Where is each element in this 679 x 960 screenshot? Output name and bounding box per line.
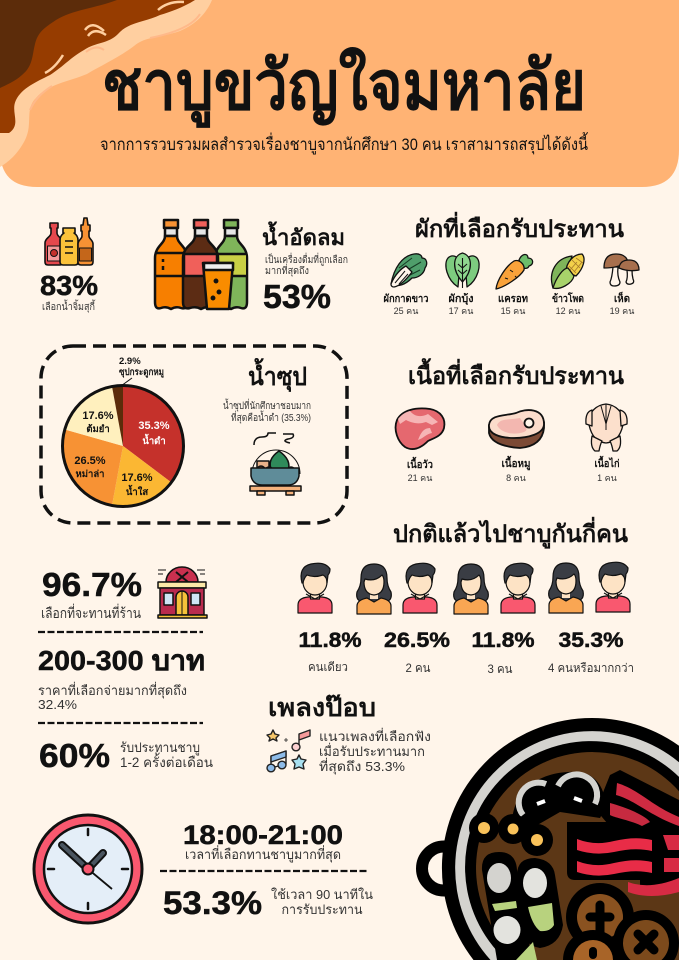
pie callout: 2.9% — [119, 356, 141, 367]
panel: vegetables — [384, 211, 639, 316]
pie chart — [62, 378, 184, 506]
description: เป็นเครื่องดื่มที่ถูกเลือก — [265, 252, 348, 266]
pie labels: หม่าล่า — [75, 469, 105, 480]
icon: carrot — [496, 254, 533, 289]
description: น้ำซุปที่นักศึกษาชอบมาก — [223, 398, 311, 412]
panel: soup — [41, 346, 347, 523]
panel: time — [34, 815, 373, 923]
icon: morning glory — [446, 253, 479, 288]
percentages: 26.5% — [384, 629, 450, 652]
icon: napa cabbage — [391, 254, 427, 287]
pie callout — [119, 356, 164, 379]
divider — [160, 870, 368, 872]
percentage: 53% — [263, 278, 331, 315]
heading: น้ำซุป — [248, 357, 307, 393]
description: เมื่อรับประทานมาก — [319, 743, 425, 759]
heading: น้ำอัดลม — [262, 221, 345, 250]
description: มากที่สุดถึง — [265, 263, 309, 277]
panel: dipping sauce — [40, 218, 98, 313]
heading: ปกติแล้วไปชาบูกันกี่คน — [393, 516, 629, 549]
pie labels: 17.6% — [82, 410, 114, 422]
description — [265, 252, 348, 277]
panel: dining habits — [38, 566, 213, 774]
duration caption: การรับประทาน — [282, 902, 363, 917]
title: ชาบูขวัญใจมหาลัย — [102, 46, 586, 129]
caption: เลือกน้ำจิ้มสุกี้ — [42, 299, 96, 313]
heading: เนื้อที่เลือกรับประทาน — [408, 357, 625, 390]
icon: soda bottles and glass — [155, 220, 247, 309]
description: แนวเพลงที่เลือกฟัง — [319, 728, 431, 744]
percentages: 11.8% — [298, 629, 362, 652]
header banner — [0, 0, 679, 187]
divider — [38, 722, 203, 724]
meat labels: เนื้อไก่ — [594, 455, 620, 470]
description: ที่สุดถึง 53.3% — [319, 758, 405, 775]
meat counts: 1 คน — [597, 473, 617, 483]
vegetable counts: 15 คน — [501, 306, 525, 316]
budget caption: ราคาที่เลือกจ่ายมากที่สุดถึง — [38, 682, 187, 699]
budget caption: 32.4% — [38, 697, 77, 712]
pie callout: ซุปกระดูกหมู — [119, 366, 164, 379]
frequency caption: 1-2 ครั้งต่อเดือน — [120, 752, 213, 770]
icon: pork — [489, 410, 544, 448]
frequency stat: 60% — [39, 737, 110, 774]
divider — [38, 631, 203, 633]
panel: soft drinks — [155, 220, 348, 315]
icon: restaurant — [158, 567, 207, 618]
dashed frame — [41, 346, 347, 523]
description — [223, 398, 311, 424]
percentages: 11.8% — [472, 629, 535, 652]
dine in stat: 96.7% — [42, 566, 142, 603]
vegetable counts: 17 คน — [449, 306, 473, 316]
icon: beef — [396, 408, 444, 449]
heading: เพลงป๊อบ — [268, 694, 376, 722]
duration stat: 53.3% — [163, 885, 262, 921]
icon: music notes — [267, 730, 310, 772]
panel: party size — [298, 516, 634, 676]
pie labels: น้ำดำ — [142, 433, 166, 447]
vegetable counts: 19 คน — [610, 306, 634, 316]
vegetable labels — [384, 291, 630, 306]
percentage: 83% — [40, 270, 98, 301]
heading: ผักที่เลือกรับประทาน — [415, 211, 625, 243]
panel: pop music — [267, 694, 431, 775]
icon: clock — [34, 815, 142, 923]
captions: 3 คน — [488, 662, 512, 676]
duration caption: ใช้เวลา 90 นาทีใน — [271, 887, 373, 902]
meat counts: 8 คน — [506, 473, 526, 483]
budget caption — [38, 682, 187, 712]
vegetable labels: ผักกาดขาว — [384, 293, 429, 305]
icon: hotpot — [250, 433, 301, 495]
vegetable counts — [394, 306, 634, 316]
captions — [308, 660, 634, 676]
time range: 18:00-21:00 — [183, 820, 343, 850]
panel: meats — [396, 357, 627, 483]
pie labels: 17.6% — [121, 472, 153, 484]
meat labels — [407, 455, 620, 471]
icon: sauce bottles — [45, 218, 93, 265]
meat counts — [408, 473, 617, 483]
meat labels: เนื้อหมู — [502, 455, 531, 471]
captions: 2 คน — [406, 661, 430, 675]
pie labels: น้ำใส — [126, 484, 148, 498]
frequency caption — [120, 740, 213, 770]
vegetable labels: เห็ด — [614, 291, 630, 305]
captions: 4 คนหรือมากกว่า — [548, 661, 634, 675]
captions: คนเดียว — [308, 660, 348, 674]
pie labels: 35.3% — [138, 420, 170, 432]
percentages — [298, 629, 624, 652]
pie labels: 26.5% — [74, 455, 106, 467]
description: ที่สุดคือน้ำดำ (35.3%) — [231, 410, 311, 424]
percentages: 35.3% — [558, 629, 624, 652]
meat labels: เนื้อวัว — [407, 456, 433, 471]
pie labels — [74, 410, 170, 498]
vegetable labels: แครอท — [498, 293, 528, 305]
duration caption — [271, 887, 373, 917]
icon: chicken — [586, 404, 627, 451]
description — [319, 728, 431, 775]
vegetable counts: 12 คน — [556, 306, 580, 316]
frequency caption: รับประทานชาบู — [120, 740, 200, 756]
time caption: เวลาที่เลือกทานชาบูมากที่สุด — [185, 845, 341, 863]
icon: mushrooms — [604, 254, 639, 286]
vegetable labels: ผักบุ้ง — [448, 292, 474, 306]
subtitle: จากการรวบรวมผลสำรวจเรื่องชาบูจากนักศึกษา 30 คน เราสามารถสรุปได้ดังนี้ — [100, 132, 588, 155]
vegetable labels: ข้าวโพด — [552, 292, 584, 305]
dine in caption: เลือกที่จะทานที่ร้าน — [41, 604, 141, 621]
meat counts: 21 คน — [408, 473, 432, 483]
icon: shabu pot — [422, 718, 679, 960]
budget stat: 200-300 บาท — [38, 645, 205, 676]
pie labels: ต้มยำ — [86, 423, 110, 435]
icon: people row — [298, 562, 630, 614]
icon: corn — [552, 254, 584, 288]
vegetable counts: 25 คน — [394, 306, 418, 316]
